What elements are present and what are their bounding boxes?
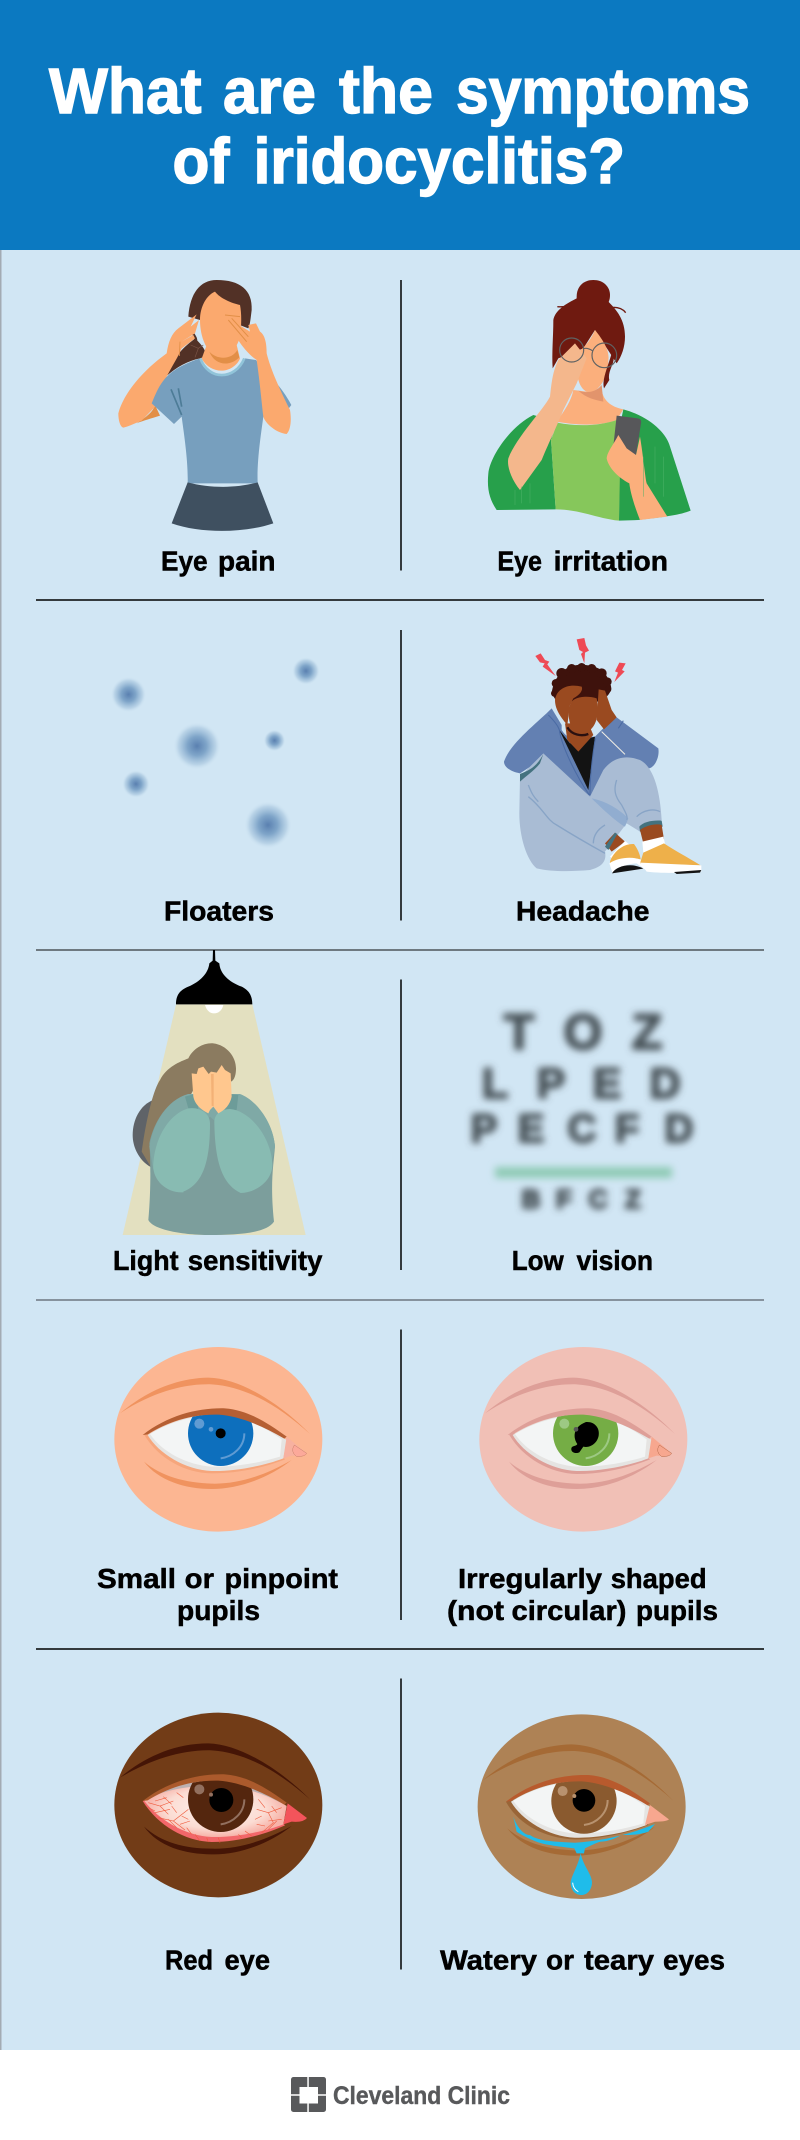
icon: blurred eye chart: Z xyxy=(632,1004,662,1060)
icon: woman covering her face beneath a lamp xyxy=(123,950,306,1235)
icon: blurred eye chart: Z xyxy=(625,1184,641,1214)
label: eye irritation: Eye xyxy=(497,546,542,576)
icon: blurred eye chart: P xyxy=(471,1107,497,1151)
title: of xyxy=(172,125,230,197)
panel: irregularly shaped pupils xyxy=(447,1347,718,1626)
icon: blurred eye chart: B xyxy=(522,1184,540,1214)
logo: Cleveland Clinic: Cleveland Clinic xyxy=(333,2082,510,2110)
label: irregularly shaped pupils: pupils xyxy=(636,1595,718,1626)
label: low vision xyxy=(512,1245,653,1276)
label: low vision: Low xyxy=(512,1245,564,1276)
icon: woman with glasses rubbing her eye xyxy=(488,280,691,521)
label: headache: Headache xyxy=(516,896,650,926)
icon: woman holding her eye xyxy=(118,280,291,531)
label: light sensitivity: Light xyxy=(113,1245,179,1276)
label: irregularly shaped pupils xyxy=(447,1563,718,1626)
title: symptoms xyxy=(456,55,750,127)
icon: blurred eye chart: T xyxy=(504,1004,534,1060)
icon: blurred eye chart: O xyxy=(564,1004,602,1060)
icon: person holding their head xyxy=(504,638,701,874)
label: eye irritation: irritation xyxy=(554,546,668,576)
label: light sensitivity xyxy=(113,1245,323,1276)
label: watery eyes: teary xyxy=(584,1944,654,1976)
icon: blurred eye chart: P xyxy=(537,1060,565,1108)
icon: teary eye xyxy=(478,1714,686,1899)
title xyxy=(49,55,750,197)
icon: blurred eye chart: F xyxy=(615,1107,639,1151)
panel: low vision xyxy=(471,1004,693,1276)
panel: eye irritation xyxy=(488,280,691,576)
icon: green eye with irregular pupil xyxy=(479,1347,687,1532)
label: watery eyes: Watery xyxy=(440,1944,537,1976)
label: red eye xyxy=(165,1944,270,1976)
label: eye pain xyxy=(161,546,276,576)
icon: blurred eye chart: F xyxy=(556,1184,572,1214)
panel: red eye xyxy=(114,1713,322,1976)
icon: floating blurred spots xyxy=(110,657,320,849)
label: eye pain: Eye xyxy=(161,546,208,576)
label: irregularly shaped pupils: shaped xyxy=(611,1563,707,1594)
label: irregularly shaped pupils: Irregularly xyxy=(458,1563,602,1594)
label: watery eyes xyxy=(440,1944,725,1976)
icon: blurred eye chart: D xyxy=(665,1107,693,1151)
label: small or pinpoint pupils xyxy=(97,1563,338,1626)
panel: watery eyes xyxy=(440,1714,725,1976)
label: eye pain: pain xyxy=(218,546,276,576)
title: are xyxy=(223,55,316,127)
panel: eye pain xyxy=(118,280,291,576)
label: small or pinpoint pupils: pinpoint xyxy=(224,1563,338,1594)
label: light sensitivity: sensitivity xyxy=(188,1245,323,1276)
panel: headache xyxy=(504,638,701,926)
label: red eye: Red xyxy=(165,1944,213,1976)
header banner xyxy=(0,0,800,250)
label: watery eyes: or xyxy=(546,1944,574,1976)
label: floaters: Floaters xyxy=(164,896,274,926)
icon: blurred eye chart: E xyxy=(593,1060,621,1108)
label: watery eyes: eyes xyxy=(663,1944,725,1976)
panel: light sensitivity xyxy=(113,950,323,1276)
icon: blue eye with pinpoint pupil xyxy=(114,1347,322,1532)
title: the xyxy=(339,55,433,127)
label: red eye: eye xyxy=(224,1944,270,1976)
label: irregularly shaped pupils: (not xyxy=(447,1595,504,1626)
icon: blurred eye chart: C xyxy=(568,1107,596,1151)
footer xyxy=(0,2050,800,2140)
panel: floaters xyxy=(110,657,320,926)
icon: blurred eye chart: L xyxy=(482,1060,508,1108)
label: eye irritation xyxy=(497,546,668,576)
logo: Cleveland Clinic xyxy=(291,2077,510,2112)
icon: blurred eye chart: D xyxy=(649,1060,681,1108)
label: low vision: vision xyxy=(576,1245,653,1276)
label: irregularly shaped pupils: circular) xyxy=(512,1595,626,1626)
icon: bloodshot eye xyxy=(114,1713,322,1897)
title: What xyxy=(49,55,202,127)
icon: blurred eye chart: E xyxy=(518,1107,544,1151)
label: small or pinpoint pupils: or xyxy=(185,1563,214,1594)
icon: blurred eye chart xyxy=(471,1004,693,1214)
panel: small or pinpoint pupils xyxy=(97,1347,338,1626)
title: iridocyclitis? xyxy=(254,125,625,197)
label: small or pinpoint pupils: Small xyxy=(97,1563,176,1594)
icon: blurred eye chart: C xyxy=(589,1184,608,1214)
label: small or pinpoint pupils: pupils xyxy=(177,1595,260,1626)
